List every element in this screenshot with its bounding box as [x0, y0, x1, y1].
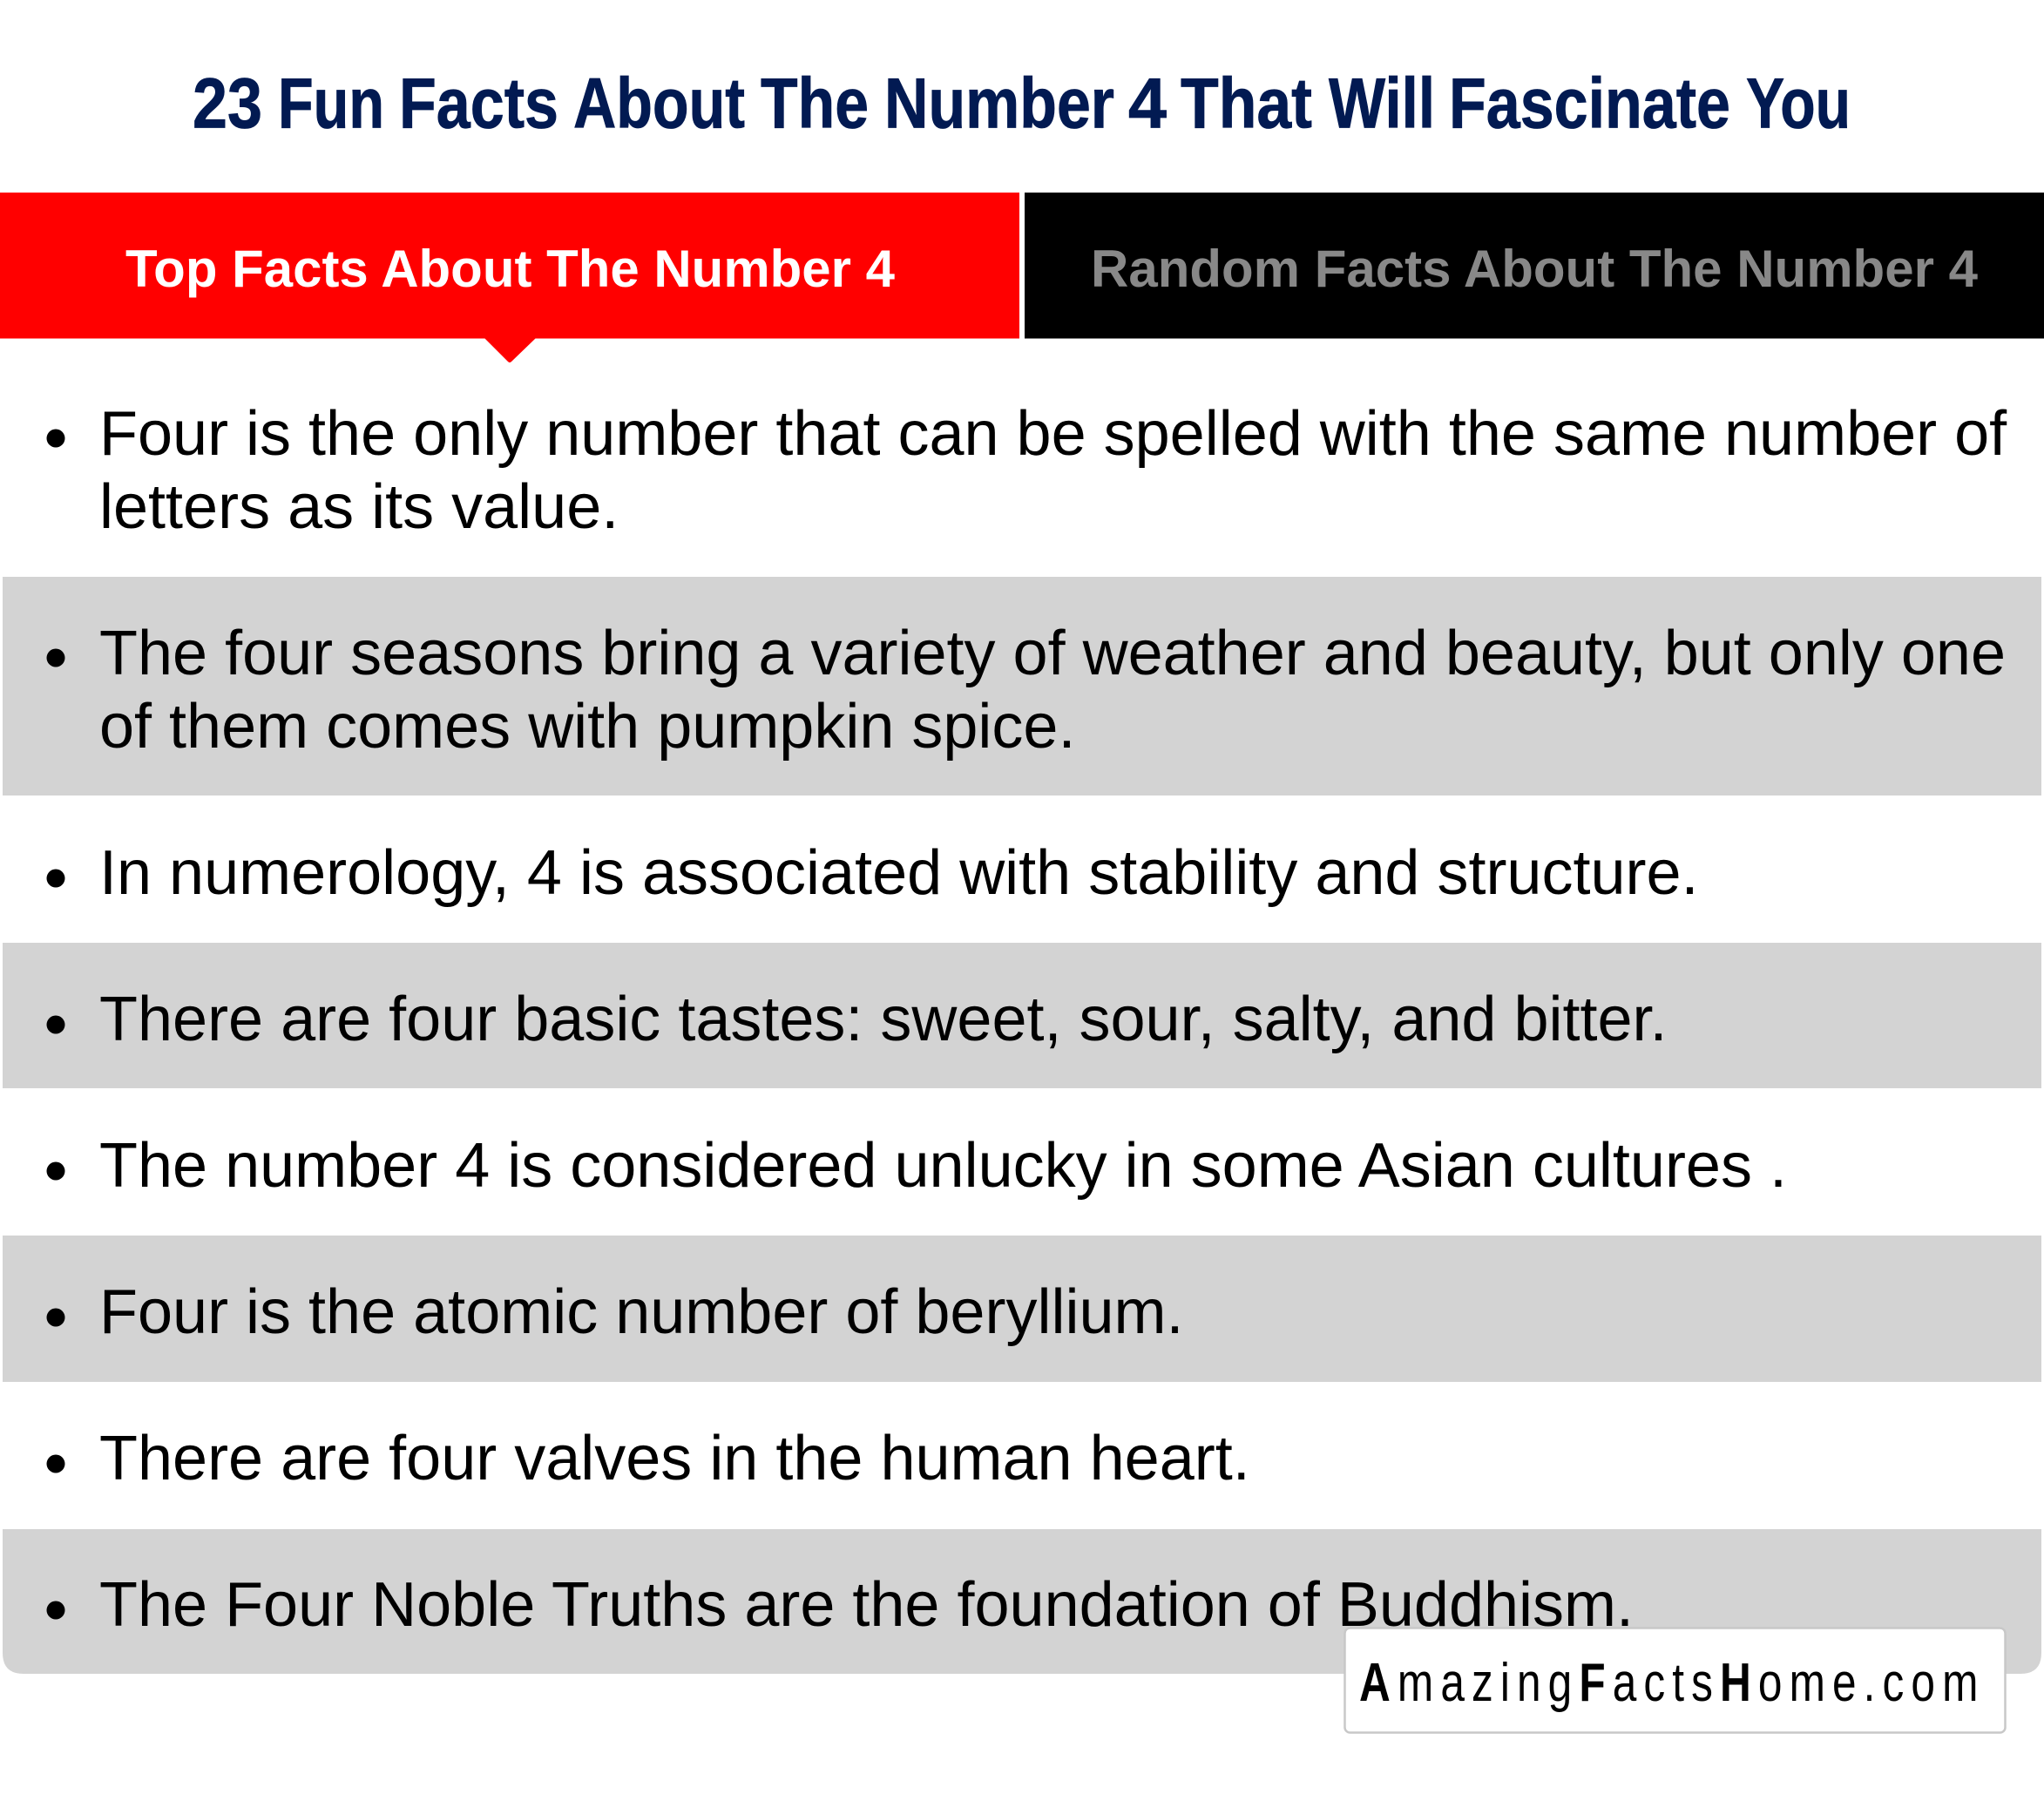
tab: random facts (inactive) — [1025, 193, 2044, 338]
watermark badge — [1345, 1628, 2006, 1732]
fact 8: The Four Noble Truths are the foundation of Buddhism. — [99, 1570, 1634, 1640]
tab: random facts (inactive): Random Facts About The Number 4 — [1091, 240, 1979, 298]
title: The — [761, 64, 869, 143]
fact 7: There are four valves in the human heart. — [99, 1424, 1250, 1493]
title: Number — [884, 64, 1114, 143]
fact 5: The number 4 is considered unlucky in some Asian cultures . — [99, 1131, 1787, 1201]
title — [193, 64, 1851, 143]
title: Fun — [278, 64, 384, 143]
fact 1 — [47, 399, 2007, 542]
fact 8 — [3, 1529, 2041, 1674]
title: About — [573, 64, 745, 143]
title: Will — [1329, 64, 1435, 143]
title: That — [1181, 64, 1312, 143]
title: Facts — [399, 64, 558, 143]
title: 4 — [1128, 64, 1167, 143]
fact 6 — [3, 1236, 2041, 1382]
tab: top facts (active) — [0, 193, 1019, 362]
tab: top facts (active): Top Facts About The Number 4 — [125, 240, 896, 298]
fact 1: Four is the only number that can be spelled with the same number of — [99, 399, 2007, 469]
title: You — [1746, 64, 1851, 143]
fact 2: of them comes with pumpkin spice. — [99, 692, 1075, 762]
fact 1: letters as its value. — [99, 472, 619, 542]
fact 4: There are four basic tastes: sweet, sour, salty, and bitter. — [99, 985, 1668, 1054]
fact 3: In numerology, 4 is associated with stability and structure. — [99, 838, 1699, 908]
fact 2 — [3, 577, 2041, 796]
watermark badge: AmazingFactsHome.com — [1359, 1652, 1978, 1712]
title: 23 — [193, 64, 262, 143]
fact 2: The four seasons bring a variety of weather and beauty, but only one — [99, 619, 2006, 688]
fact 4 — [3, 943, 2041, 1088]
fact 6: Four is the atomic number of beryllium. — [99, 1277, 1183, 1347]
title: Fascinate — [1449, 64, 1730, 143]
